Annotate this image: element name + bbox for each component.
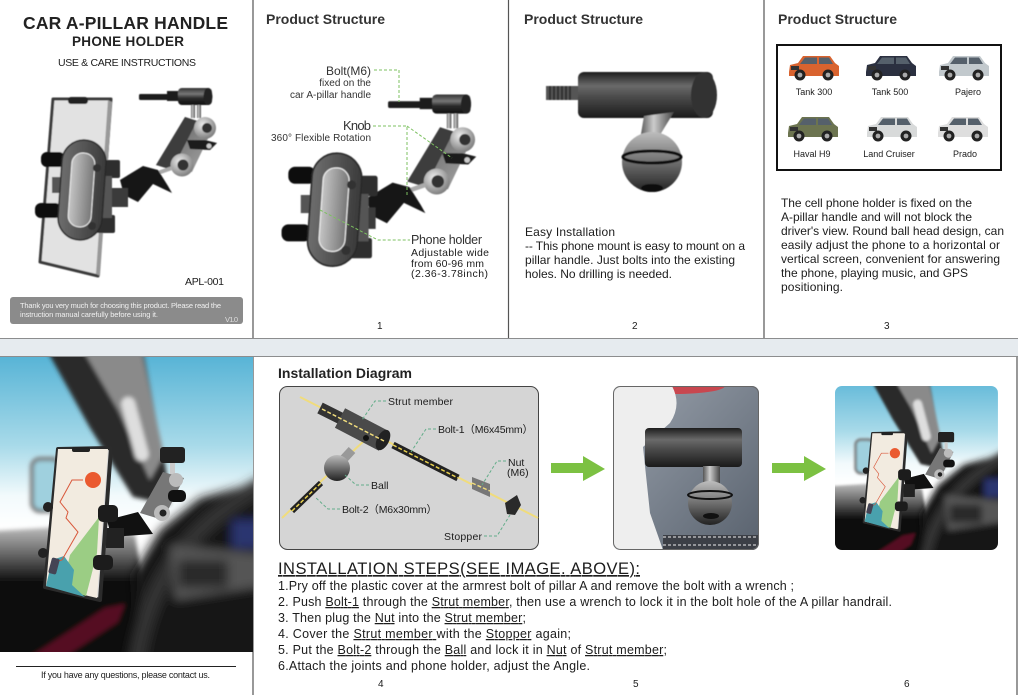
step 1: 1.Pry off the plastic cover at the armrest bolt of pillar A and remove the bolt with a wrench ; xyxy=(278,579,794,593)
car: Haval H9: Haval H9 xyxy=(793,149,831,159)
car: Tank 500: Tank 500 xyxy=(872,87,908,97)
product image: holder with phone xyxy=(35,88,217,276)
description text: the phone, playing music, and GPS xyxy=(781,266,968,280)
callout: phone holder: from 60-96 mm xyxy=(411,258,484,270)
label: strut member xyxy=(362,396,454,420)
car: Prado: Prado xyxy=(953,149,977,159)
step 3: 3. Then plug the Nut into the Strut member; xyxy=(278,611,526,625)
thank-you note: instruction manual carefully before using it. xyxy=(20,310,158,319)
description text: easily adjust the phone to a horizontal or xyxy=(781,238,1000,252)
callout: bolt: Bolt(M6) xyxy=(326,64,371,78)
step 5: 5. Put the Bolt-2 through the Ball and lock it in Nut of Strut member; xyxy=(278,643,667,657)
heading: Product Structure xyxy=(524,11,643,27)
text block: easy installation: Easy Installation xyxy=(525,225,615,239)
car: Prado xyxy=(938,117,988,159)
callout: knob xyxy=(271,118,452,195)
label: ball: Ball xyxy=(371,480,389,492)
label: strut member: Strut member xyxy=(388,396,454,408)
fold band between rows xyxy=(0,338,1018,357)
label: ball xyxy=(345,475,389,492)
step 4: 4. Cover the Strut member with the Stopper again; xyxy=(278,627,571,641)
thank-you note xyxy=(10,297,243,324)
part: bolt-1 xyxy=(393,445,458,478)
description text xyxy=(781,196,1004,294)
car: Tank 300: Tank 300 xyxy=(796,87,832,97)
description text: vertical screen, convenient for answering xyxy=(781,252,1000,266)
text block: easy installation xyxy=(525,225,745,281)
part: strut member xyxy=(320,408,393,453)
callout: phone holder: Adjustable wide xyxy=(411,247,489,259)
steps heading: INSTALLATION STEPS(SEE IMAGE. ABOVE): xyxy=(278,560,640,578)
car: Tank 300 xyxy=(789,56,839,97)
thank-you note: V1.0 xyxy=(225,315,238,324)
description text: positioning. xyxy=(781,280,843,294)
car: Tank 500 xyxy=(866,56,916,97)
exploded parts diagram xyxy=(280,386,538,550)
part: bolt-2 xyxy=(292,483,321,511)
page number 4: 4 xyxy=(378,679,384,690)
panel: product structure 1 xyxy=(266,11,489,332)
heading: Product Structure xyxy=(778,11,897,27)
arrow: step 1 to 2 xyxy=(551,456,605,481)
callout: phone holder xyxy=(320,210,489,280)
text block: easy installation: -- This phone mount is easy to mount on a xyxy=(525,239,745,253)
callout: bolt: fixed on the xyxy=(319,78,371,89)
part: ball xyxy=(324,450,352,481)
panel: installation diagram xyxy=(278,368,998,550)
model number: APL-001 xyxy=(185,276,224,288)
page number 2: 2 xyxy=(632,321,638,332)
car: Pajero: Pajero xyxy=(955,87,981,97)
car: Land Cruiser xyxy=(863,117,917,159)
callout: phone holder: Phone holder xyxy=(411,233,482,247)
panel: cover xyxy=(10,13,243,324)
label: bolt-1 xyxy=(411,424,533,452)
contact rule xyxy=(16,666,236,668)
step 2: 2. Push Bolt-1 through the Strut member, then use a wrench to lock it in the bolt hole of the A pillar handrail. xyxy=(278,595,892,609)
contact note: If you have any questions, please contact us. xyxy=(41,670,210,680)
description text: The cell phone holder is fixed on the xyxy=(781,196,972,210)
photo: completed installation xyxy=(835,386,998,550)
step 6: 6.Attach the joints and phone holder, adjust the Angle. xyxy=(278,659,590,673)
title: CAR A-PILLAR HANDLE xyxy=(23,13,228,33)
page number 6: 6 xyxy=(904,679,910,690)
label: nut: (M6) xyxy=(507,467,529,479)
callout: knob: Knob xyxy=(343,118,371,133)
description text: A-pillar handle and will not block the xyxy=(781,210,972,224)
callout: phone holder: (2.36-3.78inch) xyxy=(411,268,488,280)
panel: product structure 3 xyxy=(777,11,1004,332)
subtitle: PHONE HOLDER xyxy=(72,34,184,49)
instructions heading: USE & CARE INSTRUCTIONS xyxy=(58,57,196,69)
text block: easy installation: holes. No drilling is needed. xyxy=(525,267,672,281)
part: nut xyxy=(472,477,490,497)
compatible vehicles box xyxy=(777,45,1001,170)
label: bolt-2 xyxy=(315,497,437,516)
label: stopper xyxy=(444,515,510,543)
label: nut xyxy=(482,457,529,485)
product image: bolt and ball head xyxy=(546,72,717,192)
panel: product structure 2 xyxy=(524,11,745,332)
car: Haval H9 xyxy=(788,117,838,159)
car: Pajero xyxy=(939,56,989,97)
description text: driver's view. Round ball head design, can xyxy=(781,224,1004,238)
callout: bolt: car A-pillar handle xyxy=(290,90,371,101)
panel: in-car photo xyxy=(0,357,253,680)
label: bolt-1: Bolt-1（M6x45mm） xyxy=(438,424,533,436)
heading: Product Structure xyxy=(266,11,385,27)
arrow: step 2 to 3 xyxy=(772,456,826,481)
label: bolt-2: Bolt-2（M6x30mm） xyxy=(342,504,437,516)
page number 5: 5 xyxy=(633,679,639,690)
thank-you note: Thank you very much for choosing this product. Please read the xyxy=(20,301,221,310)
heading: Installation Diagram xyxy=(278,365,412,381)
car: Land Cruiser: Land Cruiser xyxy=(863,149,915,159)
callout: bolt xyxy=(290,64,399,102)
page number 1: 1 xyxy=(377,321,383,332)
part: stopper xyxy=(505,495,521,515)
text block: easy installation: pillar handle. Just bolts into the existing xyxy=(525,253,735,267)
label: stopper: Stopper xyxy=(444,531,482,543)
product image: holder exploded view xyxy=(282,94,476,268)
callout: knob: 360° Flexible Rotation xyxy=(271,133,371,144)
photo: mount fitted on A-pillar xyxy=(613,378,759,550)
label: nut: Nut xyxy=(508,457,524,469)
page number 3: 3 xyxy=(884,321,890,332)
photo: phone holder mounted in car xyxy=(0,357,253,652)
installation steps xyxy=(278,560,892,673)
